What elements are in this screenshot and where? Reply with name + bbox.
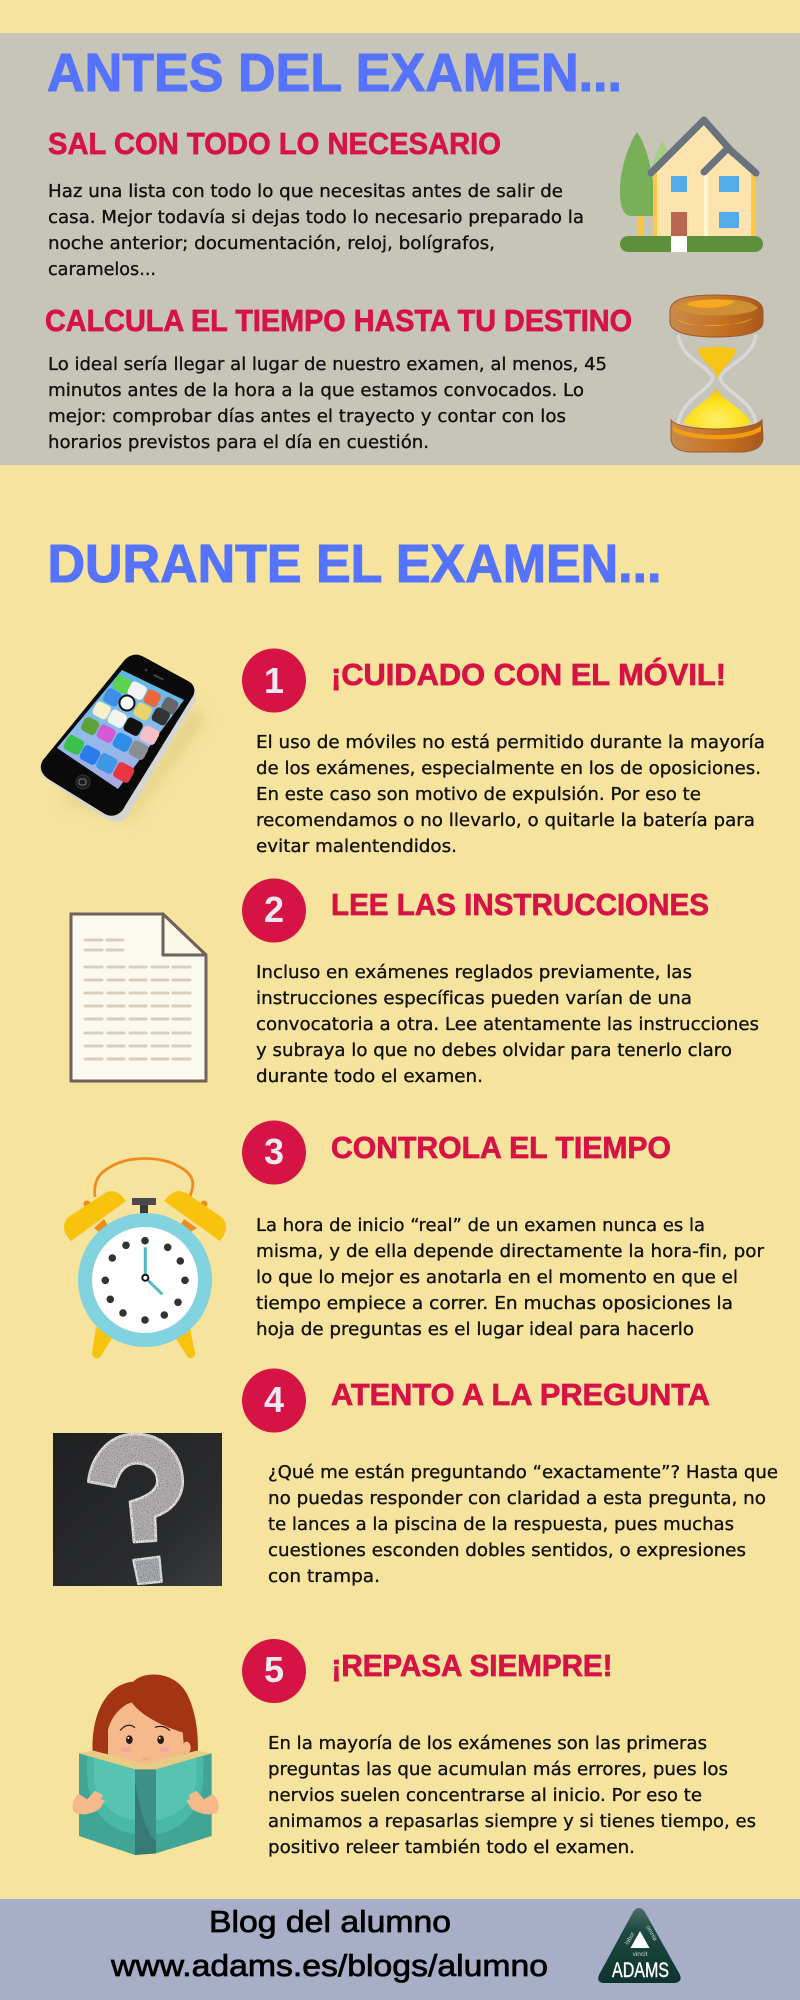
- footer text: blog del alumno: Blog del alumno: [209, 1904, 451, 1939]
- step text 1: El uso de móviles no está permitido durante la mayoría: [256, 733, 765, 753]
- step text 1: [256, 733, 765, 857]
- logo: adams: vincit: [633, 1951, 648, 1958]
- step text 3: misma, y de ella depende directamente la hora-fin, por: [256, 1242, 765, 1262]
- icon: house: [620, 120, 763, 252]
- step text 2: Incluso en exámenes reglados previamente, las: [256, 963, 692, 983]
- step text 3: La hora de inicio “real” de un examen nunca es la: [256, 1216, 705, 1236]
- number 5: 5: [264, 1649, 284, 1690]
- step text 2: [256, 963, 759, 1087]
- number 4: 4: [264, 1379, 284, 1420]
- step text 4: ¿Qué me están preguntando “exactamente”? Hasta que: [268, 1463, 778, 1483]
- number badge 1: [242, 648, 306, 712]
- panel: footer: [0, 1899, 800, 2000]
- step text 1: evitar malentendidos.: [256, 837, 457, 857]
- step title 5: ¡REPASA SIEMPRE!: [332, 1648, 612, 1683]
- step text 3: lo que lo mejor es anotarla en el momento en que el: [256, 1268, 738, 1288]
- text block: llegar con tiempo: mejor: comprobar días antes el trayecto y contar con los: [48, 407, 566, 427]
- step text 5: En la mayoría de los exámenes son las primeras: [268, 1734, 707, 1754]
- step text 5: preguntas las que acumulan más errores, pues los: [268, 1760, 728, 1780]
- panel: antes del examen: [0, 33, 800, 465]
- heading: durante el examen: DURANTE EL EXAMEN...: [48, 534, 662, 594]
- step text 2: convocatoria a otra. Lee atentamente las instrucciones: [256, 1015, 759, 1035]
- step text 2: instrucciones específicas pueden varían de una: [256, 989, 692, 1009]
- step text 4: cuestiones esconden dobles sentidos, o expresiones: [268, 1541, 746, 1561]
- step text 3: [256, 1216, 765, 1340]
- number badge 4: [242, 1368, 306, 1432]
- number badge 2: [242, 878, 306, 942]
- step text 1: de los exámenes, especialmente en los de oposiciones.: [256, 759, 761, 779]
- text block: llegar con tiempo: minutos antes de la hora a la que estamos convocados. Lo: [48, 381, 584, 401]
- text block: lista de lo necesario: [48, 182, 584, 280]
- step 2: lee las instrucciones: [242, 878, 759, 1087]
- step text 5: nervios suelen concentrarse al inicio. Por eso te: [268, 1786, 702, 1806]
- step 5: repasa siempre: [242, 1639, 756, 1858]
- number badge 5: [242, 1639, 306, 1703]
- step text 5: [268, 1734, 756, 1858]
- step 1: cuidado con el movil: [242, 648, 765, 857]
- footer text: url: www.adams.es/blogs/alumno: [110, 1948, 548, 1983]
- icon: alarm clock: [64, 1158, 226, 1358]
- step text 5: animamos a repasarlas siempre y si tienes tiempo, es: [268, 1812, 756, 1832]
- step text 2: durante todo el examen.: [256, 1067, 483, 1087]
- step text 1: recomendamos o no llevarlo, o quitarle la batería para: [256, 811, 755, 831]
- step text 1: En este caso son motivo de expulsión. Por eso te: [256, 785, 701, 805]
- step title 3: CONTROLA EL TIEMPO: [331, 1130, 671, 1165]
- logo: adams: ADAMS: [612, 1959, 669, 1982]
- step text 5: positivo releer también todo el examen.: [268, 1838, 635, 1858]
- step title 2: LEE LAS INSTRUCCIONES: [331, 887, 709, 922]
- step text 4: [268, 1463, 778, 1587]
- logo: adams: omnia: [644, 1925, 658, 1943]
- step text 2: y subraya lo que no debes olvidar para tenerlo claro: [256, 1041, 732, 1061]
- subheading: sal con todo lo necesario: SAL CON TODO LO NECESARIO: [48, 126, 501, 161]
- step text 4: te lances a la piscina de la respuesta, pues muchas: [268, 1515, 734, 1535]
- step text 4: con trampa.: [268, 1567, 380, 1587]
- heading: antes del examen: ANTES DEL EXAMEN...: [47, 43, 622, 103]
- number badge 3: [242, 1120, 306, 1184]
- number 3: 3: [264, 1131, 284, 1172]
- step text 3: hoja de preguntas es el lugar ideal para hacerlo: [256, 1320, 694, 1340]
- text block: lista de lo necesario: noche anterior; documentación, reloj, bolígrafos,: [48, 234, 495, 254]
- text block: lista de lo necesario: Haz una lista con todo lo que necesitas antes de salir de: [48, 182, 563, 202]
- icon: hourglass: [670, 295, 763, 452]
- step title 1: ¡CUIDADO CON EL MÓVIL!: [331, 656, 726, 692]
- text block: llegar con tiempo: horarios previstos para el día en cuestión.: [48, 433, 429, 453]
- step text 4: no puedas responder con claridad a esta pregunta, no: [268, 1489, 766, 1509]
- text block: llegar con tiempo: [48, 355, 607, 453]
- number 1: 1: [264, 660, 284, 701]
- logo: adams: labor: [625, 1931, 636, 1946]
- logo: adams: [598, 1908, 681, 1983]
- icon: smartphone: [41, 655, 205, 822]
- subheading: calcula el tiempo: CALCULA EL TIEMPO HASTA TU DESTINO: [45, 303, 632, 338]
- text block: llegar con tiempo: Lo ideal sería llegar al lugar de nuestro examen, al menos, 45: [48, 355, 607, 375]
- image: chalk question mark: [53, 1433, 222, 1586]
- icon: document: [71, 914, 206, 1081]
- step text 3: tiempo empiece a correr. En muchas oposiciones la: [256, 1294, 733, 1314]
- icon: girl reading book: [73, 1675, 219, 1855]
- text block: lista de lo necesario: casa. Mejor todavía si dejas todo lo necesario preparado la: [48, 208, 584, 228]
- step 4: atento a la pregunta: [242, 1368, 778, 1587]
- step title 4: ATENTO A LA PREGUNTA: [331, 1377, 710, 1412]
- number 2: 2: [264, 889, 284, 930]
- text block: lista de lo necesario: caramelos...: [48, 260, 156, 280]
- step 3: controla el tiempo: [242, 1120, 765, 1340]
